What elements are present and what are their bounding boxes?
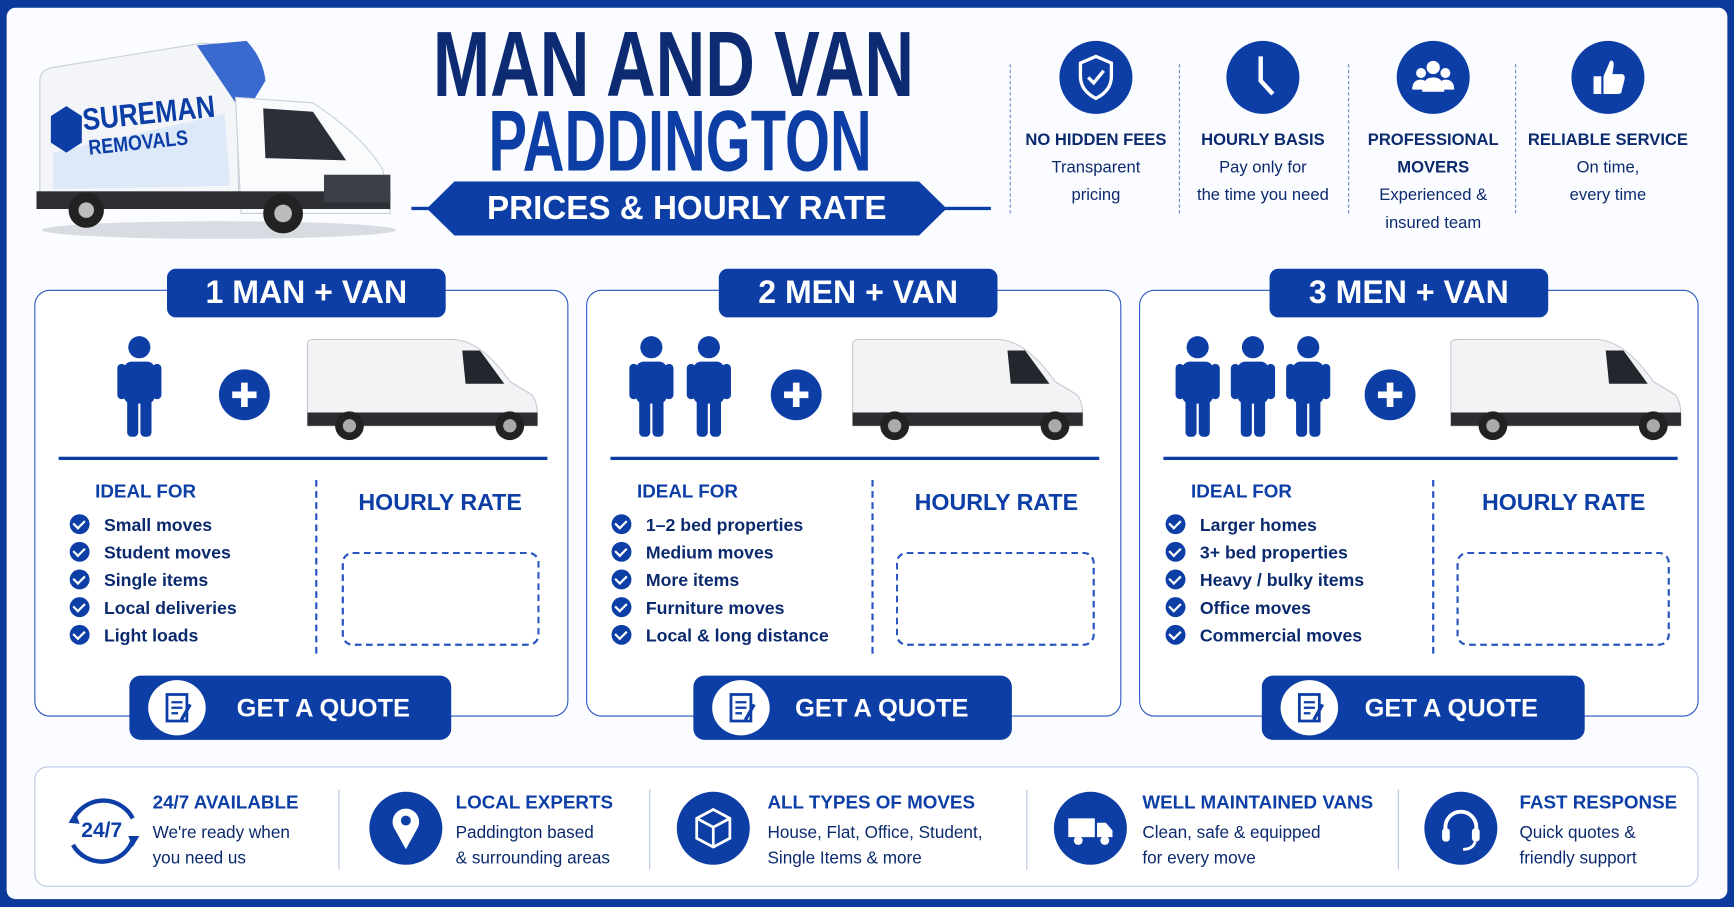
ideal for list: IDEAL FOR [95,481,196,502]
illustration: branded removal truck: SUREMAN [81,90,217,138]
ideal for list [1166,481,1364,646]
benefit: local experts [369,792,613,868]
tab heading: 3 MEN + VAN [1309,275,1509,311]
hourly rate heading: HOURLY RATE [358,490,522,515]
ideal for list: Furniture moves [646,599,784,618]
feature: hourly basis: Pay only for [1219,158,1307,177]
icon: team [1397,41,1470,114]
panel: 2 men + van [586,290,1121,717]
benefit: fast response: FAST RESPONSE [1519,792,1677,813]
panel: 1 man + van [34,290,568,717]
tab heading [167,269,446,317]
icon: thumbs up [1571,41,1644,114]
tab heading [719,269,997,317]
benefit: local experts: LOCAL EXPERTS [456,792,613,813]
title: MAN AND VAN [433,12,914,116]
benefit: fast response: friendly support [1519,849,1637,868]
ideal for list: Local deliveries [104,599,237,618]
icon: three persons [1176,336,1330,437]
benefit: all types of moves: House, Flat, Office, Student, [767,824,982,843]
ideal for list: Light loads [104,627,198,646]
button: get a quote [693,676,1012,740]
illustration: van [1450,339,1682,440]
feature: no hidden fees [1025,40,1166,205]
ideal for list: 1–2 bed properties [646,516,803,535]
feature: professional movers: MOVERS [1397,158,1469,177]
panel: 3 men + van [1139,290,1699,717]
rate box (empty) [342,552,540,646]
illustration: van [852,339,1084,440]
tab heading [1270,269,1548,317]
benefit: fast response: Quick quotes & [1519,824,1636,843]
feature: professional movers [1368,40,1499,232]
illustration: branded removal truck [36,40,396,239]
benefit: well maintained vans: WELL MAINTAINED VANS [1142,792,1373,813]
ideal for list: Medium moves [646,544,774,563]
feature: professional movers: insured team [1385,213,1481,232]
rate box (empty) [1456,552,1670,646]
benefit: 24/7 [68,792,299,868]
icon: clock [1226,41,1299,114]
icon: 24/7 cycle: 24/7 [81,819,122,842]
tab heading: 1 MAN + VAN [205,275,407,311]
feature: reliable service: On time, [1577,158,1639,177]
icon: box [677,792,750,865]
ideal for list [612,481,829,646]
icon: 24/7 cycle [68,798,140,864]
ideal for list: Office moves [1200,599,1311,618]
icon: plus [771,369,822,420]
feature: hourly basis: the time you need [1197,186,1329,205]
banner: prices & hourly rate: PRICES & HOURLY RATE [487,190,886,227]
ideal for list: IDEAL FOR [637,481,738,502]
ideal for list: IDEAL FOR [1191,481,1292,502]
icon: shield [1059,41,1132,114]
illustration: van [306,339,538,440]
feature: professional movers: Experienced & [1379,186,1487,205]
benefit: all types of moves: Single Items & more [767,849,922,868]
ideal for list: Small moves [104,516,212,535]
icon: person [117,336,162,437]
button: get a quote: GET A QUOTE [795,693,968,722]
icon: truck [1054,792,1127,865]
hourly rate heading: HOURLY RATE [915,490,1078,515]
benefit: 24/7: 24/7 AVAILABLE [153,792,299,813]
feature: professional movers: PROFESSIONAL [1368,130,1499,149]
panel: bottom benefits bar [34,766,1699,887]
benefit: local experts: & surrounding areas [456,849,610,868]
tab heading: 2 MEN + VAN [758,275,958,311]
button: get a quote: GET A QUOTE [237,693,410,722]
ideal for list: Larger homes [1200,516,1317,535]
button: get a quote: GET A QUOTE [1365,693,1538,722]
benefit: 24/7: you need us [153,849,246,868]
icon: plus [1365,369,1416,420]
button: get a quote [129,676,451,740]
ideal for list [70,481,237,646]
icon: headset [1424,792,1497,865]
benefit: local experts: Paddington based [456,824,594,843]
ideal for list: Student moves [104,544,231,563]
button: get a quote [1262,676,1585,740]
feature: reliable service: RELIABLE SERVICE [1528,130,1688,149]
illustration: branded removal truck: REMOVALS [87,126,189,160]
feature: no hidden fees: Transparent [1051,158,1140,177]
benefit: well maintained vans [1054,792,1373,868]
feature: hourly basis [1197,40,1329,205]
title [433,12,914,189]
benefit: well maintained vans: Clean, safe & equipped [1142,824,1321,843]
feature: reliable service [1528,40,1688,205]
hourly rate heading: HOURLY RATE [1482,490,1645,515]
benefit: fast response [1424,792,1677,868]
benefit: all types of moves [676,792,982,868]
benefit: 24/7: We're ready when [153,824,290,843]
banner: prices & hourly rate [411,182,991,236]
icon: two persons [629,336,731,437]
ideal for list: More items [646,572,739,591]
icon: location pin [369,792,442,865]
ideal for list: Local & long distance [646,627,829,646]
ideal for list: Heavy / bulky items [1200,572,1364,591]
rate box (empty) [896,552,1095,646]
benefit: all types of moves: ALL TYPES OF MOVES [767,792,975,813]
ideal for list: Single items [104,572,208,591]
feature: no hidden fees: NO HIDDEN FEES [1025,130,1166,149]
icon: plus [219,369,270,420]
ideal for list: Commercial moves [1200,627,1362,646]
title: PADDINGTON [489,92,872,189]
feature: hourly basis: HOURLY BASIS [1201,130,1325,149]
benefit: well maintained vans: for every move [1142,849,1256,868]
feature: no hidden fees: pricing [1071,186,1120,205]
ideal for list: 3+ bed properties [1200,544,1348,563]
feature: reliable service: every time [1570,186,1646,205]
